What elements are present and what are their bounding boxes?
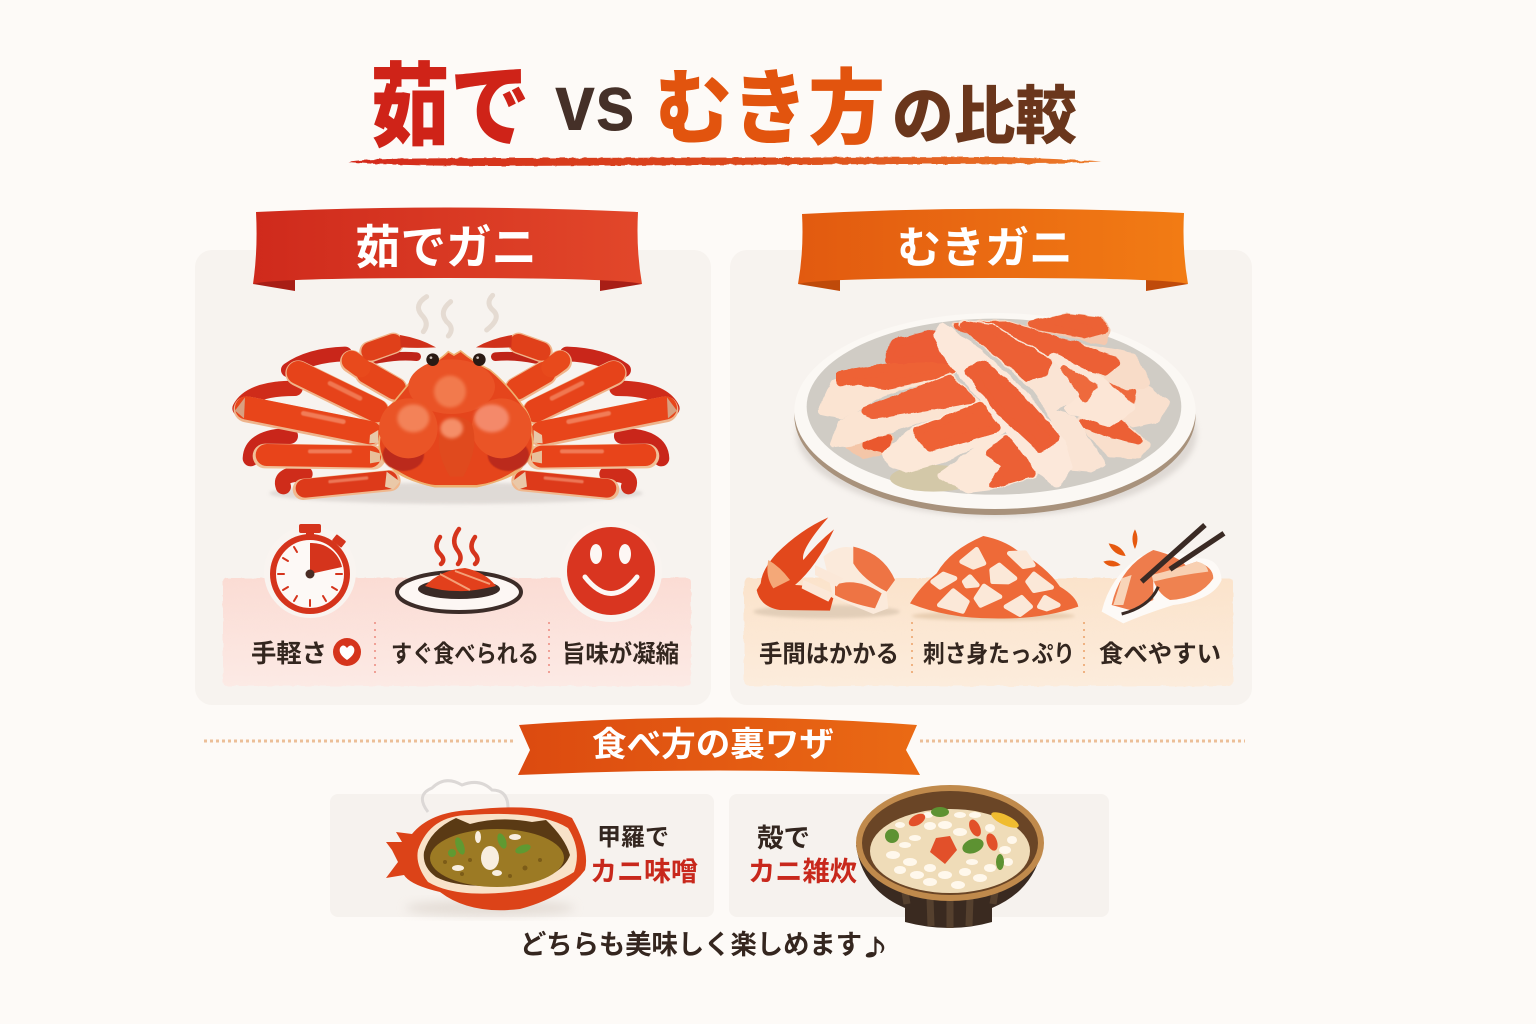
steam xyxy=(418,295,496,336)
panel: boiled crab xyxy=(195,208,711,705)
panel: peeled crab xyxy=(730,209,1252,705)
feature strip: peeled crab xyxy=(744,578,1233,686)
carapace xyxy=(379,351,533,487)
icon: steaming plate xyxy=(397,529,521,612)
label: concentrated flavour: 旨味が凝縮 xyxy=(562,640,679,668)
text: with the shell: 殻で xyxy=(757,823,810,853)
ribbon: eating tips heading xyxy=(518,718,920,775)
title: の比較 xyxy=(892,82,1077,152)
text: crab porridge: カニ雑炊 xyxy=(748,857,857,887)
joints xyxy=(400,335,436,348)
ribbon: peeled crab heading: むきガニ xyxy=(897,224,1073,273)
label: convenience with heart xyxy=(251,638,361,668)
leg bodies xyxy=(298,373,377,411)
card: crab miso in shell xyxy=(330,781,714,917)
title: 茹で xyxy=(370,57,530,159)
icon: steam cloud xyxy=(422,781,508,812)
title: むき方 xyxy=(655,64,885,155)
label: convenience with heart: 手軽さ xyxy=(251,640,327,668)
ribbon: boiled crab heading: 茹でガニ xyxy=(355,221,537,274)
closing message xyxy=(520,925,890,967)
title underline brush stroke xyxy=(348,157,1102,166)
label: easy to eat: 食べやすい xyxy=(1099,641,1221,668)
icon: crab claws xyxy=(753,517,900,618)
label: plenty of sashimi meat: 刺さ身たっぷり xyxy=(923,641,1075,668)
feature strip: boiled crab xyxy=(223,578,691,686)
leg highlights xyxy=(303,383,367,482)
text: in the shell: 甲羅で xyxy=(597,824,669,851)
rear legs xyxy=(288,354,345,370)
title: vs xyxy=(555,58,635,147)
ribbon: eating tips heading: 食べ方の裏ワザ xyxy=(592,726,834,764)
label: ready to eat: すぐ食べられる xyxy=(391,641,539,668)
illustration: crab shell with miso xyxy=(386,807,586,916)
leg rims xyxy=(298,373,377,412)
icon: crab meat with chopsticks xyxy=(1102,525,1224,623)
icon: stopwatch xyxy=(264,524,356,618)
closing message: ♪ xyxy=(860,925,890,967)
illustration: boiled snow crab xyxy=(235,295,677,504)
illustration: plate of peeled crab legs xyxy=(794,313,1197,517)
ribbon: boiled crab heading xyxy=(253,208,642,291)
closing message: どちらも美味しく楽しめます xyxy=(520,930,862,960)
section divider: dotted lines xyxy=(204,740,1245,742)
text: crab miso: カニ味噌 xyxy=(590,857,698,887)
crab leg meat sticks xyxy=(822,317,1165,489)
title xyxy=(370,57,1077,159)
card: crab porridge xyxy=(729,785,1109,928)
icon: smiley face xyxy=(560,520,662,622)
ribbon: peeled crab heading xyxy=(798,209,1188,291)
label: takes effort: 手間はかかる xyxy=(759,641,899,668)
icon: pile of crab meat xyxy=(910,536,1078,621)
illustration: bowl of crab porridge xyxy=(856,785,1044,928)
